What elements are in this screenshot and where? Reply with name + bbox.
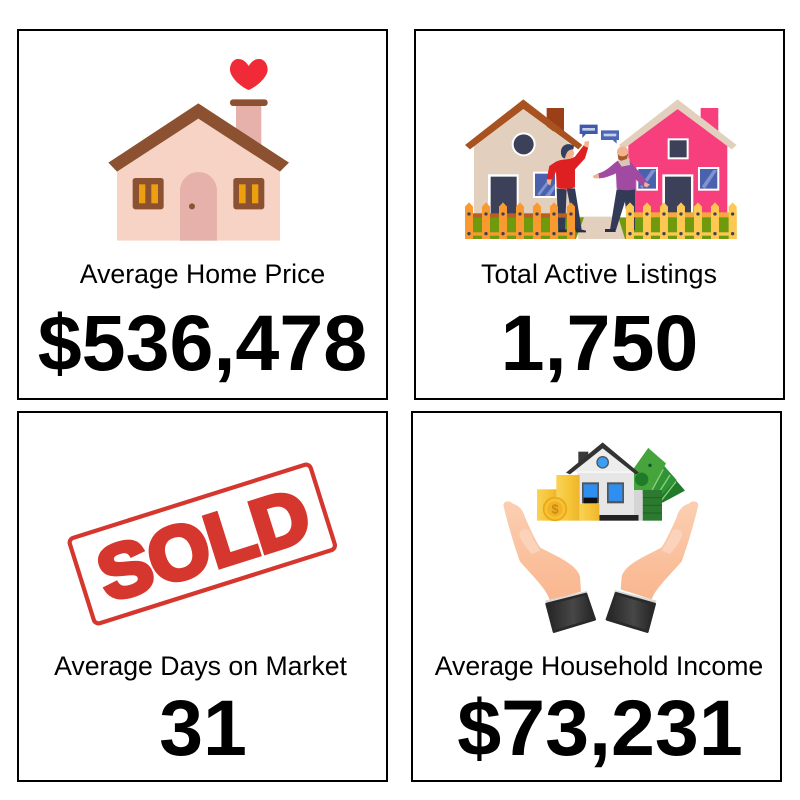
coin stacks: [537, 475, 599, 521]
label: average household income: Average Household Income: [435, 651, 763, 681]
value: income: $73,231: [457, 683, 743, 772]
person: man in red: [547, 141, 589, 232]
value: home price: $536,478: [38, 298, 367, 387]
speech bubbles: [580, 125, 619, 144]
coin stacks: $: [551, 503, 559, 517]
fence: right yellow: [626, 202, 737, 239]
illustration: neighbours and houses: [465, 99, 737, 239]
panel: average days on market: [18, 412, 387, 781]
icon: sold stamp: SOLD: [88, 473, 320, 618]
path and lawn: [465, 217, 737, 239]
icon: house with heart: [108, 59, 289, 241]
value: days: 31: [159, 683, 247, 772]
right house: [619, 99, 737, 218]
panel: average home price: [18, 30, 387, 399]
person: bald man in purple: [593, 146, 650, 232]
value: listings: 1,750: [501, 298, 698, 387]
panel: total active listings: [415, 30, 784, 399]
left hand: [503, 501, 595, 632]
panel: average household income: [412, 412, 781, 781]
model house: [566, 442, 643, 521]
left house: [465, 99, 582, 218]
label: average days on market: Average Days on Market: [54, 651, 348, 681]
icon: hands holding house and money: [503, 442, 698, 632]
banknotes: [634, 448, 685, 521]
right hand: [607, 501, 698, 632]
label: total active listings: Total Active Listings: [481, 259, 717, 289]
label: average home price: Average Home Price: [80, 259, 325, 289]
fence: left orange: [465, 202, 575, 239]
